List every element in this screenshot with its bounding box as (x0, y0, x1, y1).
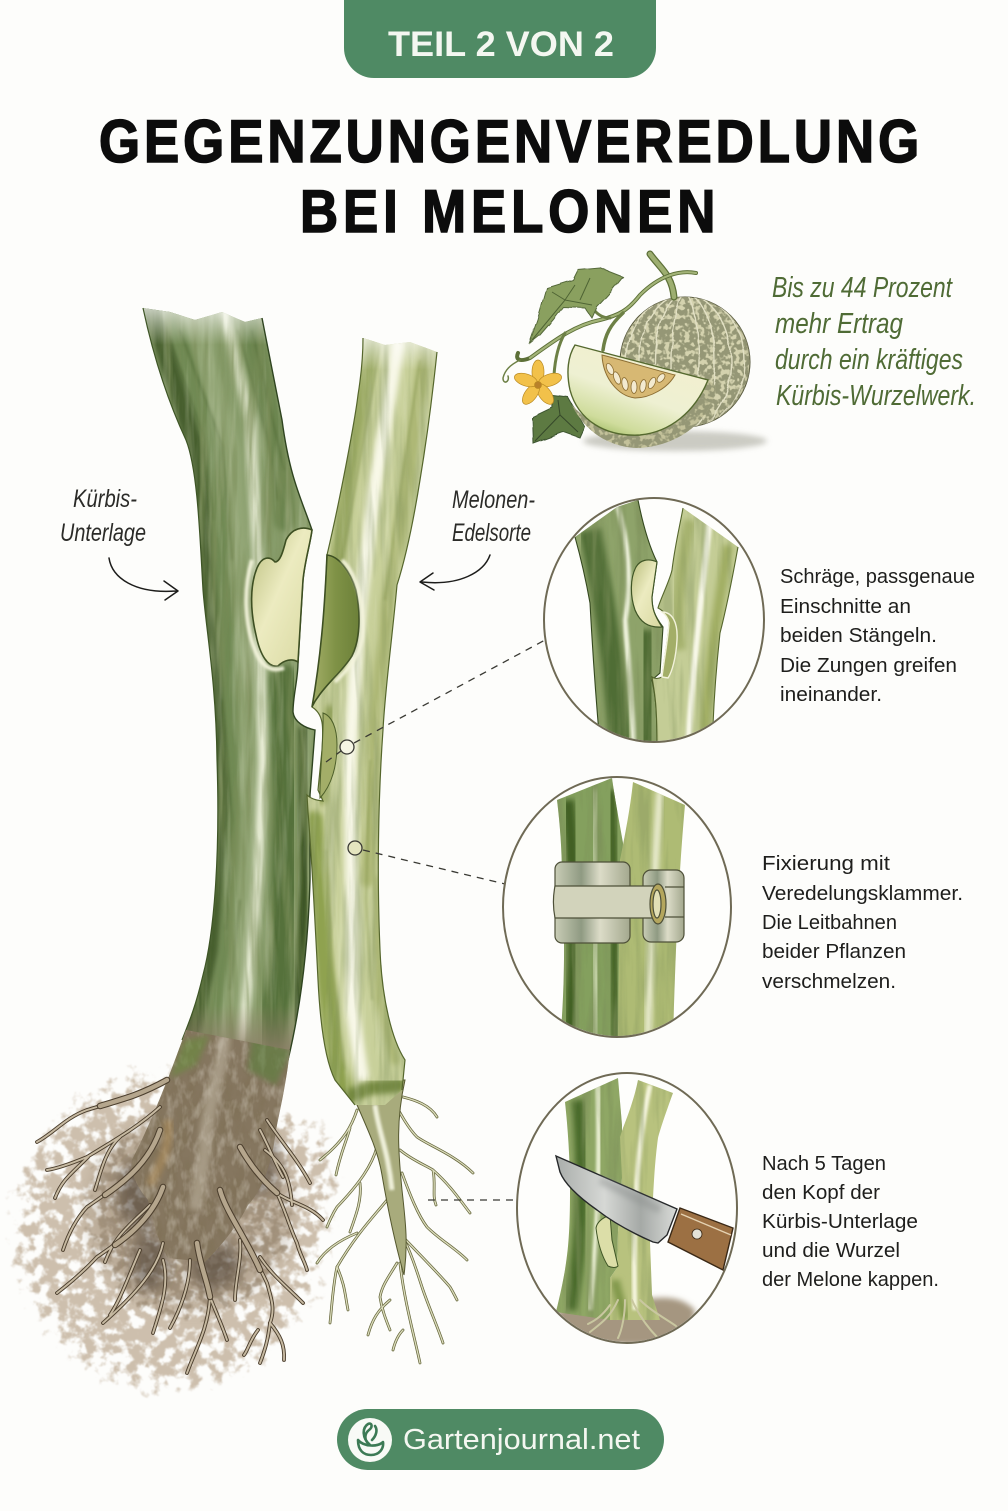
right stem (618, 782, 685, 1036)
text: step 3: und die Wurzel (762, 1240, 900, 1262)
text: step 3: Nach 5 Tagen (762, 1153, 886, 1175)
icon: sprout logo (348, 1418, 392, 1462)
title (99, 108, 919, 245)
leader line: step 2 (348, 841, 505, 884)
leaf: upper (530, 268, 623, 343)
soil (553, 1298, 695, 1345)
tongue of melon stem (320, 713, 337, 798)
small roots (588, 1300, 676, 1338)
callout text: yield: Bis zu 44 Prozent (772, 272, 954, 304)
panel: step 1 cuts (544, 495, 764, 750)
text: step 1: ineinander. (780, 684, 882, 706)
text: step 2: Fixierung mit (762, 853, 890, 875)
panel: step 2 clamp (503, 775, 731, 1040)
leaf: lower (532, 395, 585, 443)
text: step 2 (762, 853, 963, 993)
melon slice (567, 344, 716, 448)
header badge: Teil 2 von 2: TEIL 2 VON 2 (388, 25, 614, 64)
label: Melonen-Edelsorte: Melonen- (452, 486, 535, 514)
text: step 1: beiden Stängeln. (780, 625, 937, 647)
notch in stem (596, 1215, 618, 1268)
left stem (557, 778, 623, 1036)
illustration: melon scion stem (306, 338, 438, 1106)
left stem (556, 1078, 622, 1320)
right stem (652, 508, 738, 741)
label: Kürbis-Unterlage (60, 485, 146, 547)
text: step 2: beider Pflanzen (762, 941, 906, 963)
panel: step 3 knife (517, 1073, 737, 1345)
text: step 2: verschmelzen. (762, 971, 896, 993)
text: step 1: Schräge, passgenaue (780, 566, 975, 588)
illustration: soil around the pumpkin roots (5, 1060, 345, 1400)
leader line: step 1 (326, 640, 545, 762)
knife blade (556, 1156, 677, 1243)
text: step 3: Kürbis-Unterlage (762, 1211, 918, 1233)
illustration: pumpkin rootstock stem (142, 308, 316, 1060)
notch cut in melon stem (312, 555, 359, 707)
label: Kürbis-Unterlage: Unterlage (60, 519, 146, 547)
text: step 2: Die Leitbahnen (762, 912, 897, 934)
label: Melonen-Edelsorte (452, 486, 535, 547)
footer badge: Gartenjournal.net (337, 1409, 664, 1470)
label: Melonen-Edelsorte: Edelsorte (452, 519, 531, 547)
vine and stems (503, 254, 696, 382)
text: step 3 (762, 1153, 939, 1291)
text: step 1: Die Zungen greifen (780, 655, 957, 677)
knife handle (668, 1208, 733, 1270)
illustration: melon roots (317, 1080, 473, 1363)
text: step 1: Einschnitte an (780, 596, 911, 618)
title: GEGENZUNGENVEREDLUNG (99, 108, 919, 175)
callout text: yield: durch ein kräftiges (775, 344, 963, 376)
flower (513, 360, 563, 407)
text: step 3: der Melone kappen. (762, 1269, 939, 1291)
illustration: melon with slice, leaves and flower (503, 254, 767, 455)
whole melon (620, 296, 750, 427)
leader line: step 3 (428, 1199, 517, 1201)
arrow: to pumpkin stem (109, 558, 178, 600)
text: step 3: den Kopf der (762, 1182, 880, 1204)
label: Kürbis-Unterlage: Kürbis- (73, 485, 137, 513)
left stem (575, 500, 662, 741)
notch cut in pumpkin stem (252, 528, 312, 666)
illustration: pumpkin roots (37, 1025, 323, 1373)
text: step 2: Veredelungsklammer. (762, 883, 963, 905)
callout text: yield (772, 272, 976, 412)
callout text: yield: mehr Ertrag (775, 308, 903, 340)
arrow: to melon stem (420, 555, 490, 590)
clamp (554, 862, 684, 943)
footer badge: Gartenjournal.net: Gartenjournal.net (403, 1424, 640, 1456)
right stem (610, 1080, 673, 1320)
header badge: Teil 2 von 2 (344, 0, 656, 78)
text: step 1 (780, 566, 975, 706)
title: BEI MELONEN (300, 178, 715, 245)
